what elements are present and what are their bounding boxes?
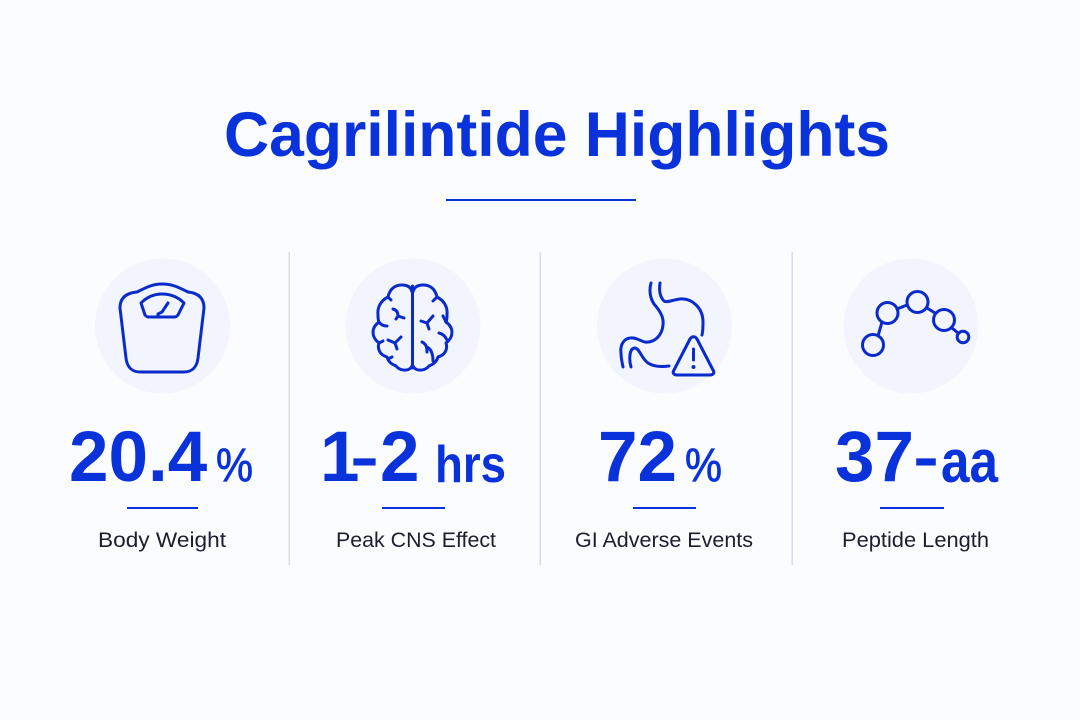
label: peak CNS effect: Peak CNS Effect bbox=[336, 528, 496, 552]
stat unit: percent: % bbox=[216, 438, 253, 491]
stat unit: aa: aa bbox=[941, 428, 999, 495]
panel: GI adverse events bbox=[575, 258, 753, 552]
panel: peak CNS effect bbox=[320, 258, 506, 552]
icon: stomach with warning bbox=[597, 258, 732, 394]
stat: 72: 72 bbox=[598, 418, 677, 497]
label: GI adverse events: GI Adverse Events bbox=[575, 528, 753, 552]
stat: 37: 37 bbox=[835, 418, 914, 497]
stat: 20.4%: 20.4 bbox=[69, 418, 208, 497]
stat unit: hrs: hrs bbox=[435, 436, 506, 494]
stat unit: percent: % bbox=[685, 438, 722, 491]
stat: 1–2: 1 bbox=[320, 418, 360, 497]
icon: weighing scale bbox=[95, 258, 230, 394]
label: peptide length: Peptide Length bbox=[842, 528, 989, 552]
stat dash: – bbox=[352, 418, 377, 497]
stat dash: – bbox=[915, 418, 937, 497]
stat: 1–2: 2 bbox=[380, 418, 420, 497]
label: body weight: Body Weight bbox=[98, 528, 226, 552]
icon: peptide chain bbox=[844, 258, 978, 394]
title: Cagrilintide Highlights bbox=[224, 100, 890, 170]
panel: peptide length bbox=[835, 258, 999, 552]
icon: brain bbox=[346, 258, 480, 394]
panel: body weight bbox=[69, 258, 253, 552]
